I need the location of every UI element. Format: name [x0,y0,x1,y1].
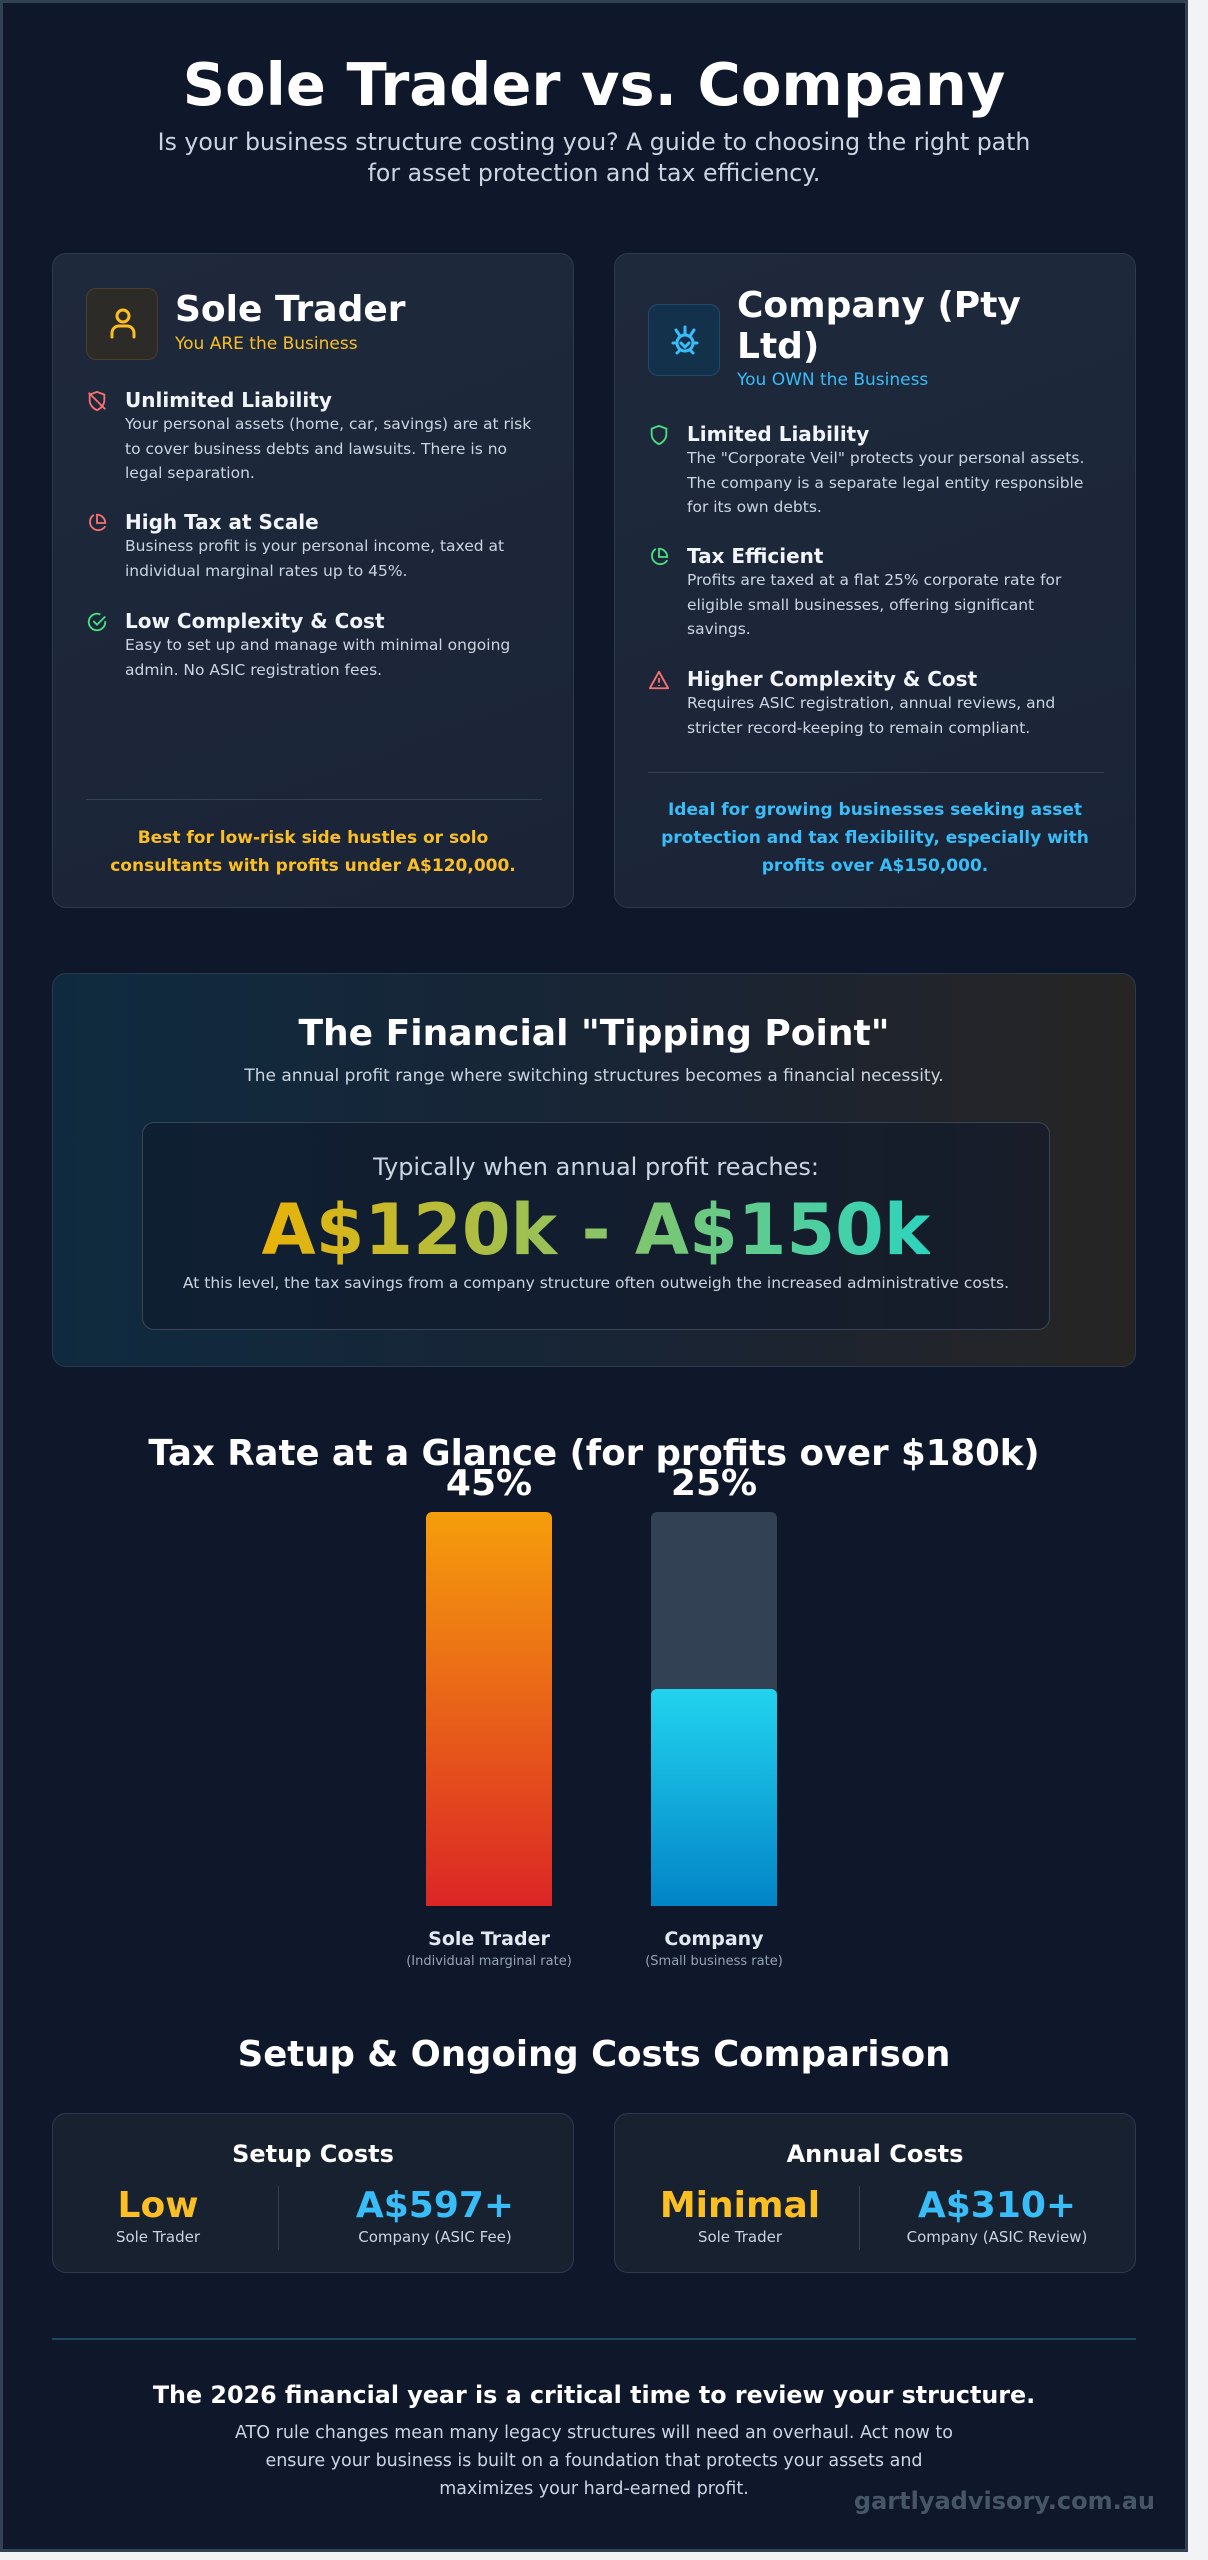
item: unlimited liability: Unlimited Liability [125,388,332,412]
item: high tax [89,510,504,580]
item: limited liability: The "Corporate Veil" protects your personal assets. The company is a separate legal entity responsible for its own debts. [687,449,1084,516]
inner box: range [142,1122,1050,1330]
item: limited liability: Limited Liability [687,422,869,446]
bar chart: tax rates [148,1433,1040,1969]
bar: sole trader: 45% [446,1463,532,1504]
heading: The Financial "Tipping Point" [298,1013,889,1054]
heading: Company (Pty Ltd) [737,285,1021,367]
item: low complexity: Easy to set up and manage with minimal ongoing admin. No ASIC registration fees. [125,636,510,678]
panel: tipping point: The annual profit range where switching structures becomes a financial necessity. [244,1066,944,1086]
stat: company annual [907,2185,1087,2246]
big number: A$120k - A$150k [262,1189,930,1271]
callout: ideal for: Ideal for growing businesses seeking asset protection and tax flexibility, especially with profits over A$150,000. [661,800,1089,876]
panel: sole trader: You ARE the Business [175,334,358,354]
footer heading: The 2026 financial year is a critical time to review your structure. [153,2381,1035,2409]
stat: company annual: Company (ASIC Review) [907,2228,1087,2246]
panel: sole trader [52,253,574,908]
item: tax efficient [651,544,1062,638]
item: higher complexity: Requires ASIC registration, annual reviews, and stricter record-keeping to remain compliant. [687,694,1055,736]
panel: company [614,253,1136,908]
bar: company: Company [664,1928,764,1950]
subtitle: for asset protection and tax efficiency. [368,159,820,187]
item: higher complexity [648,667,1055,736]
panel: tipping point [52,973,1136,1367]
bar: company [645,1463,783,1969]
item: limited liability [650,422,1084,516]
panel: annual costs: Annual Costs [787,2140,963,2168]
subtitle: Is your business structure costing you? A guide to choosing the right path [158,128,1030,156]
item: low complexity: Low Complexity & Cost [125,609,385,633]
item: high tax: High Tax at Scale [125,510,319,534]
bar: sole trader: (Individual marginal rate) [406,1954,572,1969]
inner box: range: At this level, the tax savings from a company structure often outweigh the increased administrative costs. [183,1274,1009,1292]
icon: person [86,288,158,360]
panel: annual costs [614,2113,1136,2273]
stat: sole trader annual: Sole Trader [698,2228,782,2246]
stat: sole trader setup [116,2185,200,2246]
bar chart: tax rates: Tax Rate at a Glance (for profits over $180k) [148,1433,1040,1474]
item: tax efficient: Profits are taxed at a flat 25% corporate rate for eligible small businesses, offering significant savings. [687,571,1061,638]
item: unlimited liability: Your personal assets (home, car, savings) are at risk to cover business debts and lawsuits. There is no legal separation. [125,415,531,482]
stat: sole trader setup: Low [118,2185,198,2226]
stat: company setup [356,2185,514,2246]
bar: company: 25% [671,1463,757,1504]
panel: setup costs [52,2113,574,2273]
panel: setup costs: Setup Costs [232,2140,394,2168]
subtitle [158,128,1030,187]
item: higher complexity: Higher Complexity & Cost [687,667,977,691]
inner box: range: Typically when annual profit reaches: [373,1153,819,1181]
stat: sole trader setup: Sole Trader [116,2228,200,2246]
panel: company: You OWN the Business [737,370,928,390]
stat: company setup: Company (ASIC Fee) [358,2228,512,2246]
item: low complexity [88,609,510,678]
title: Sole Trader vs. Company [183,50,1005,119]
watermark: gartlyadvisory.com.au [854,2487,1155,2515]
item: unlimited liability [88,388,532,482]
bar: sole trader: Sole Trader [428,1928,550,1950]
callout: best for: Best for low-risk side hustles or solo consultants with profits under A$120,000. [110,828,516,876]
stat: company annual: A$310+ [918,2185,1076,2226]
footer text: ATO rule changes mean many legacy structures will need an overhaul. Act now to ensure your business is built on a foundation that protects your assets and maximizes your hard-earned profit. [235,2423,953,2499]
stat: sole trader annual: Minimal [660,2185,820,2226]
bar: sole trader [406,1463,572,1969]
bar: company: (Small business rate) [645,1954,783,1969]
stat: sole trader annual [660,2185,820,2246]
item: high tax: Business profit is your personal income, taxed at individual marginal rates up to 45%. [125,537,504,580]
item: tax efficient: Tax Efficient [687,544,823,568]
heading: Sole Trader [175,289,406,330]
icon: company [648,304,720,376]
heading: costs: Setup & Ongoing Costs Comparison [238,2034,950,2075]
stat: company setup: A$597+ [356,2185,514,2226]
